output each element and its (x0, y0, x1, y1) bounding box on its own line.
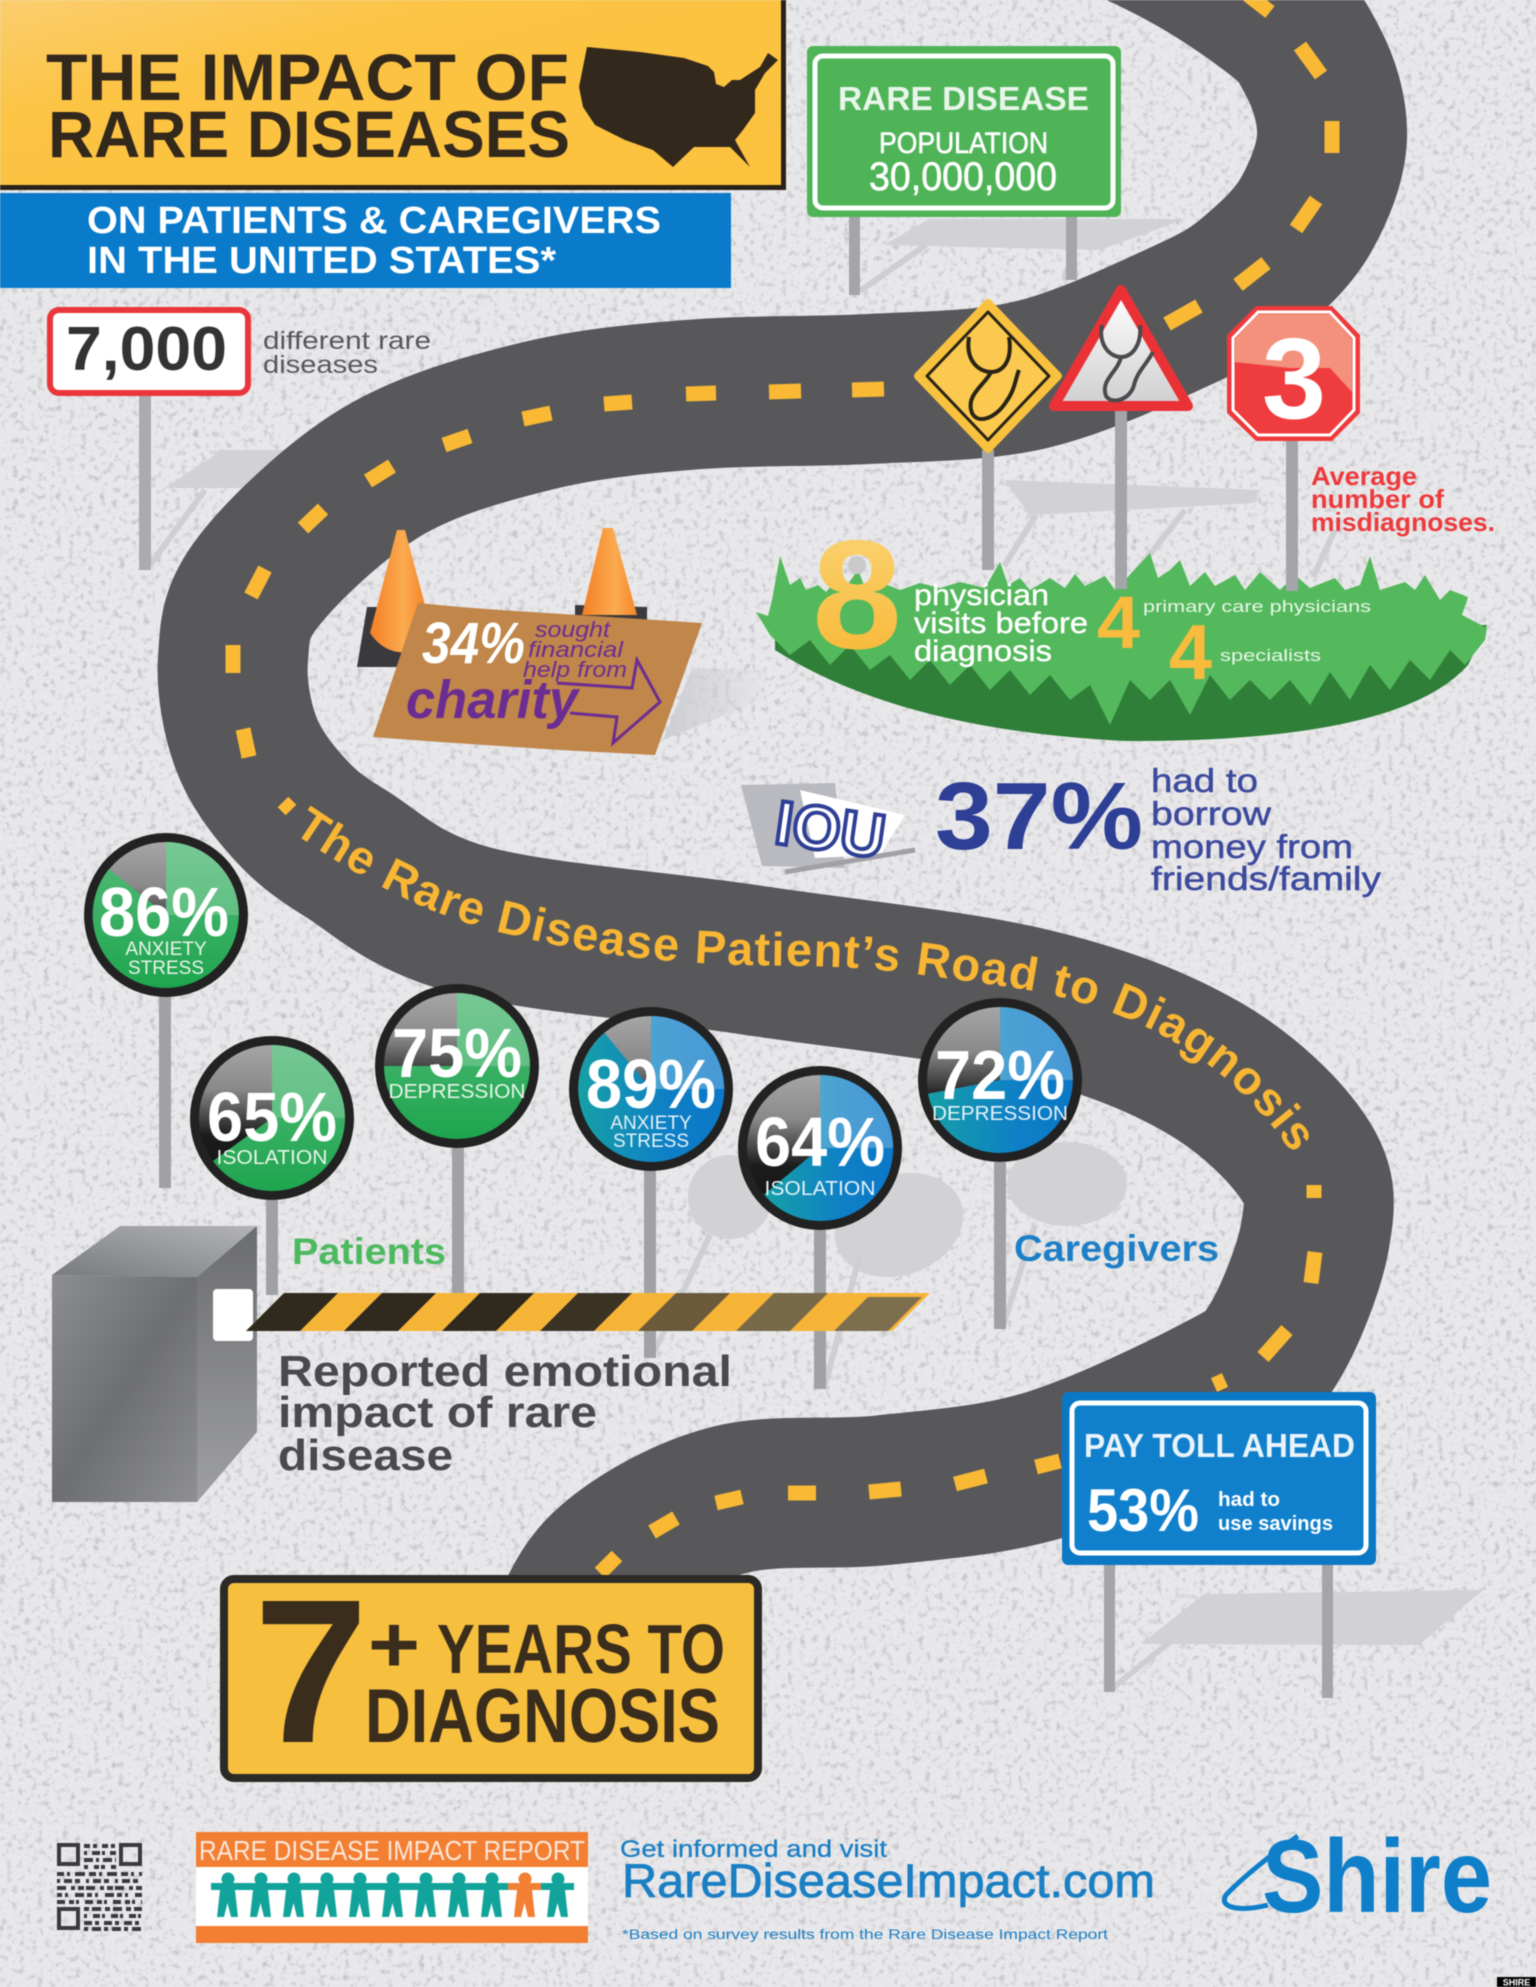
icon: IOU note: IOU (771, 789, 890, 872)
website call to action: Get informed and visit (620, 1836, 887, 1863)
misdiagnoses caption: Average (1311, 461, 1417, 491)
title panel (0, 0, 786, 190)
sign: 7,000 different rare diseases: 7,000 (66, 315, 227, 384)
caregiver dial: 64% isolation: ISOLATION (764, 1178, 876, 1200)
icon: QR code (57, 1845, 142, 1929)
cardboard charity sign: sought (535, 617, 611, 642)
physician visits stats on the grass: 8 (812, 508, 902, 681)
patient dial: 75% depression: 75% (392, 1014, 522, 1092)
emotional impact posts (159, 996, 1006, 1389)
emotional impact caption (278, 1347, 732, 1480)
misdiagnoses caption: number of (1311, 484, 1444, 514)
caregiver dial: 72% depression (918, 998, 1082, 1162)
sign: 7,000 different rare diseases (50, 310, 431, 570)
misdiagnoses caption: misdiagnoses. (1311, 507, 1495, 537)
toll sign: 53% used savings: PAY TOLL AHEAD (1084, 1427, 1355, 1464)
37% borrow statistic: friends/family (1151, 860, 1382, 897)
grass mound (756, 553, 1487, 741)
37% borrow statistic: borrow (1151, 795, 1271, 832)
physician visits stats on the grass: specialists (1220, 646, 1321, 665)
patient dial: 65% isolation: 65% (207, 1078, 337, 1156)
triangle warning sign with stethoscope (1054, 290, 1188, 406)
sign: 7+ years to diagnosis: DIAGNOSIS (365, 1674, 720, 1759)
caregiver dial: 89% anxiety stress: ANXIETY (610, 1113, 692, 1134)
striped barrier arm (213, 1289, 930, 1341)
traffic cones (357, 528, 647, 667)
patient dial: 86% anxiety stress: ANXIETY (125, 939, 207, 960)
toll sign: 53% used savings: had to (1218, 1489, 1280, 1511)
toll sign: 53% used savings: 53% (1087, 1477, 1199, 1544)
patient dial: 65% isolation: ISOLATION (216, 1147, 328, 1169)
sign: 7,000 different rare diseases: diseases (263, 351, 378, 379)
sign: 7+ years to diagnosis: 7 (254, 1557, 368, 1786)
icon: row of people, one in ten highlighted (211, 1872, 574, 1917)
rare disease impact report badge: RARE DISEASE IMPACT REPORT (199, 1835, 585, 1866)
patient dial: 75% depression (375, 984, 539, 1148)
37% borrow statistic: 37% (935, 763, 1143, 870)
patient dial: 86% anxiety stress: STRESS (128, 958, 204, 979)
website call to action: *Based on survey results from the Rare Disease Impact Report (622, 1926, 1108, 1942)
subtitle banner (0, 193, 731, 288)
sign: 7+ years to diagnosis: YEARS TO (437, 1610, 725, 1688)
website call to action: RareDiseaseImpact.com (622, 1854, 1155, 1907)
37% borrow statistic: money from (1151, 828, 1353, 865)
patient dial: 75% depression: DEPRESSION (388, 1081, 526, 1103)
caregiver dial: 64% isolation (738, 1066, 902, 1230)
title text: THE IMPACT OF (46, 40, 569, 114)
subtitle banner: ON PATIENTS & CAREGIVERS (87, 200, 661, 242)
sign: rare disease population: RARE DISEASE (838, 80, 1089, 117)
sign: rare disease population (807, 46, 1121, 295)
icon: IOU note (741, 783, 915, 872)
rare disease impact report badge (196, 1832, 588, 1943)
misdiagnoses caption (1311, 461, 1495, 537)
Shire logo: Shire (1262, 1819, 1492, 1935)
sign: 7+ years to diagnosis (224, 1557, 758, 1786)
sign shadows on the ground (150, 219, 1483, 1690)
patients label: Patients (292, 1231, 446, 1272)
octagon sign: 3 misdiagnoses: 3 (1262, 315, 1326, 443)
37% borrow statistic: had to (1151, 762, 1258, 799)
patient dial: 86% anxiety stress (84, 833, 248, 997)
toll sign: 53% used savings (1062, 1392, 1376, 1698)
caregiver dial: 64% isolation: 64% (755, 1103, 885, 1181)
37% borrow statistic (935, 762, 1382, 897)
subtitle banner: IN THE UNITED STATES* (87, 240, 556, 282)
caregiver dial: 89% anxiety stress (569, 1007, 733, 1171)
road title text: The Rare Disease Patient’s Road to Diagnosis (301, 805, 1310, 1150)
sign: rare disease population: 30,000,000 (869, 155, 1057, 199)
physician visits stats on the grass: diagnosis (914, 635, 1052, 668)
emotional impact caption: disease (278, 1431, 453, 1480)
toll sign: 53% used savings: use savings (1218, 1513, 1333, 1535)
source credit tag (1497, 1977, 1536, 1987)
caregivers label: Caregivers (1014, 1228, 1219, 1269)
concrete barrier block (52, 1226, 257, 1502)
posts for the diagnosis signs (982, 411, 1298, 591)
icon: purple arrow (557, 660, 660, 743)
physician visits stats on the grass: visits before (914, 607, 1088, 640)
caregiver dial: 89% anxiety stress: STRESS (613, 1131, 689, 1152)
cardboard charity sign (373, 603, 702, 755)
caregiver dial: 72% depression: DEPRESSION (932, 1103, 1068, 1125)
cardboard charity sign: 34% (422, 611, 525, 676)
cardboard charity sign: help from (523, 657, 627, 682)
sign: 7+ years to diagnosis: + (368, 1600, 420, 1689)
emotional impact caption: Reported emotional (278, 1347, 732, 1396)
physician visits stats on the grass (812, 508, 1371, 696)
octagon sign: 3 misdiagnoses (1227, 306, 1360, 443)
physician visits stats on the grass: 4 (1097, 581, 1140, 664)
patient dial: 65% isolation (190, 1036, 354, 1200)
title text (46, 40, 570, 171)
patient dial: 86% anxiety stress: 86% (99, 873, 229, 951)
icon: United States map (579, 47, 778, 167)
diamond sign with stethoscope (918, 303, 1058, 449)
emotional impact caption: impact of rare (278, 1388, 597, 1437)
physician visits stats on the grass: physician (914, 579, 1049, 612)
road centre dashes (233, 0, 1332, 1573)
caregiver dial: 89% anxiety stress: 89% (586, 1045, 716, 1123)
cardboard charity sign: financial (528, 637, 624, 662)
caregiver dial: 72% depression: 72% (935, 1036, 1065, 1114)
website call to action (620, 1836, 1155, 1942)
physician visits stats on the grass: primary care physicians (1143, 597, 1371, 616)
sign: rare disease population: POPULATION (879, 127, 1048, 160)
cardboard charity sign: charity (406, 670, 581, 730)
winding road (233, 0, 1332, 1650)
title text: RARE DISEASES (48, 97, 570, 171)
sign: 7,000 different rare diseases: different rare (263, 327, 431, 355)
physician visits stats on the grass: 4 (1169, 608, 1212, 696)
